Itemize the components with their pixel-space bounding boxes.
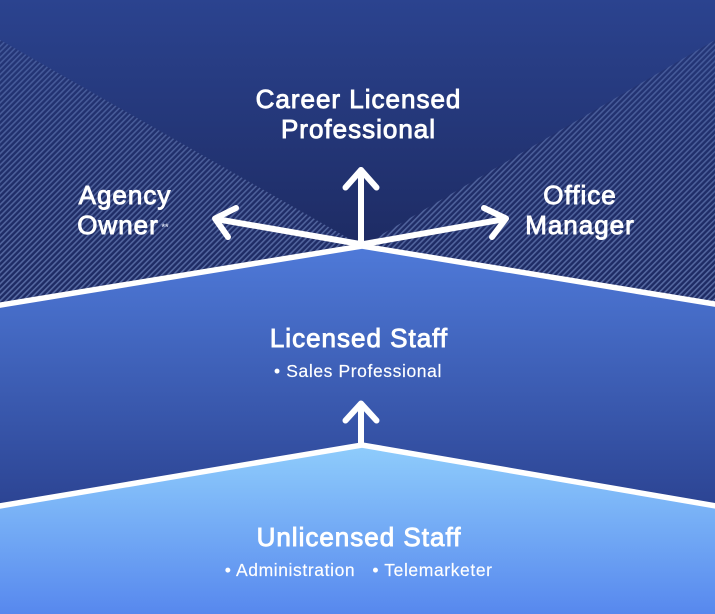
panel: unlicensed staff band — [0, 445, 715, 614]
panel: career background — [0, 0, 715, 310]
heading: unlicensed staff: Unlicensed Staff — [257, 522, 461, 552]
hatched wedge: left — [0, 40, 362, 306]
arrow: up to career licensed professional — [346, 170, 376, 244]
heading: office manager: Office — [543, 180, 617, 210]
heading: office manager: Manager — [525, 210, 635, 240]
heading: career licensed professional: Professional — [281, 114, 436, 144]
panel: licensed staff band — [0, 246, 715, 530]
heading: career licensed professional: Career Licensed — [256, 84, 461, 114]
arrow: right to office manager — [364, 208, 506, 244]
arrow: up from unlicensed to licensed — [346, 404, 376, 444]
heading: agency owner — [77, 180, 171, 240]
heading: agency owner: Owner — [77, 210, 159, 240]
heading: agency owner: Agency — [79, 180, 171, 210]
heading: licensed staff: Licensed Staff — [270, 323, 448, 353]
arrow: left to agency owner — [215, 208, 360, 244]
hatched wedge: right — [362, 40, 715, 306]
text: roles — [225, 560, 493, 580]
text: roles: • Administration — [225, 560, 355, 580]
heading: agency owner: ** — [161, 222, 169, 232]
text: roles: • Telemarketer — [372, 560, 493, 580]
text: sales professional: • Sales Professional — [274, 361, 442, 381]
